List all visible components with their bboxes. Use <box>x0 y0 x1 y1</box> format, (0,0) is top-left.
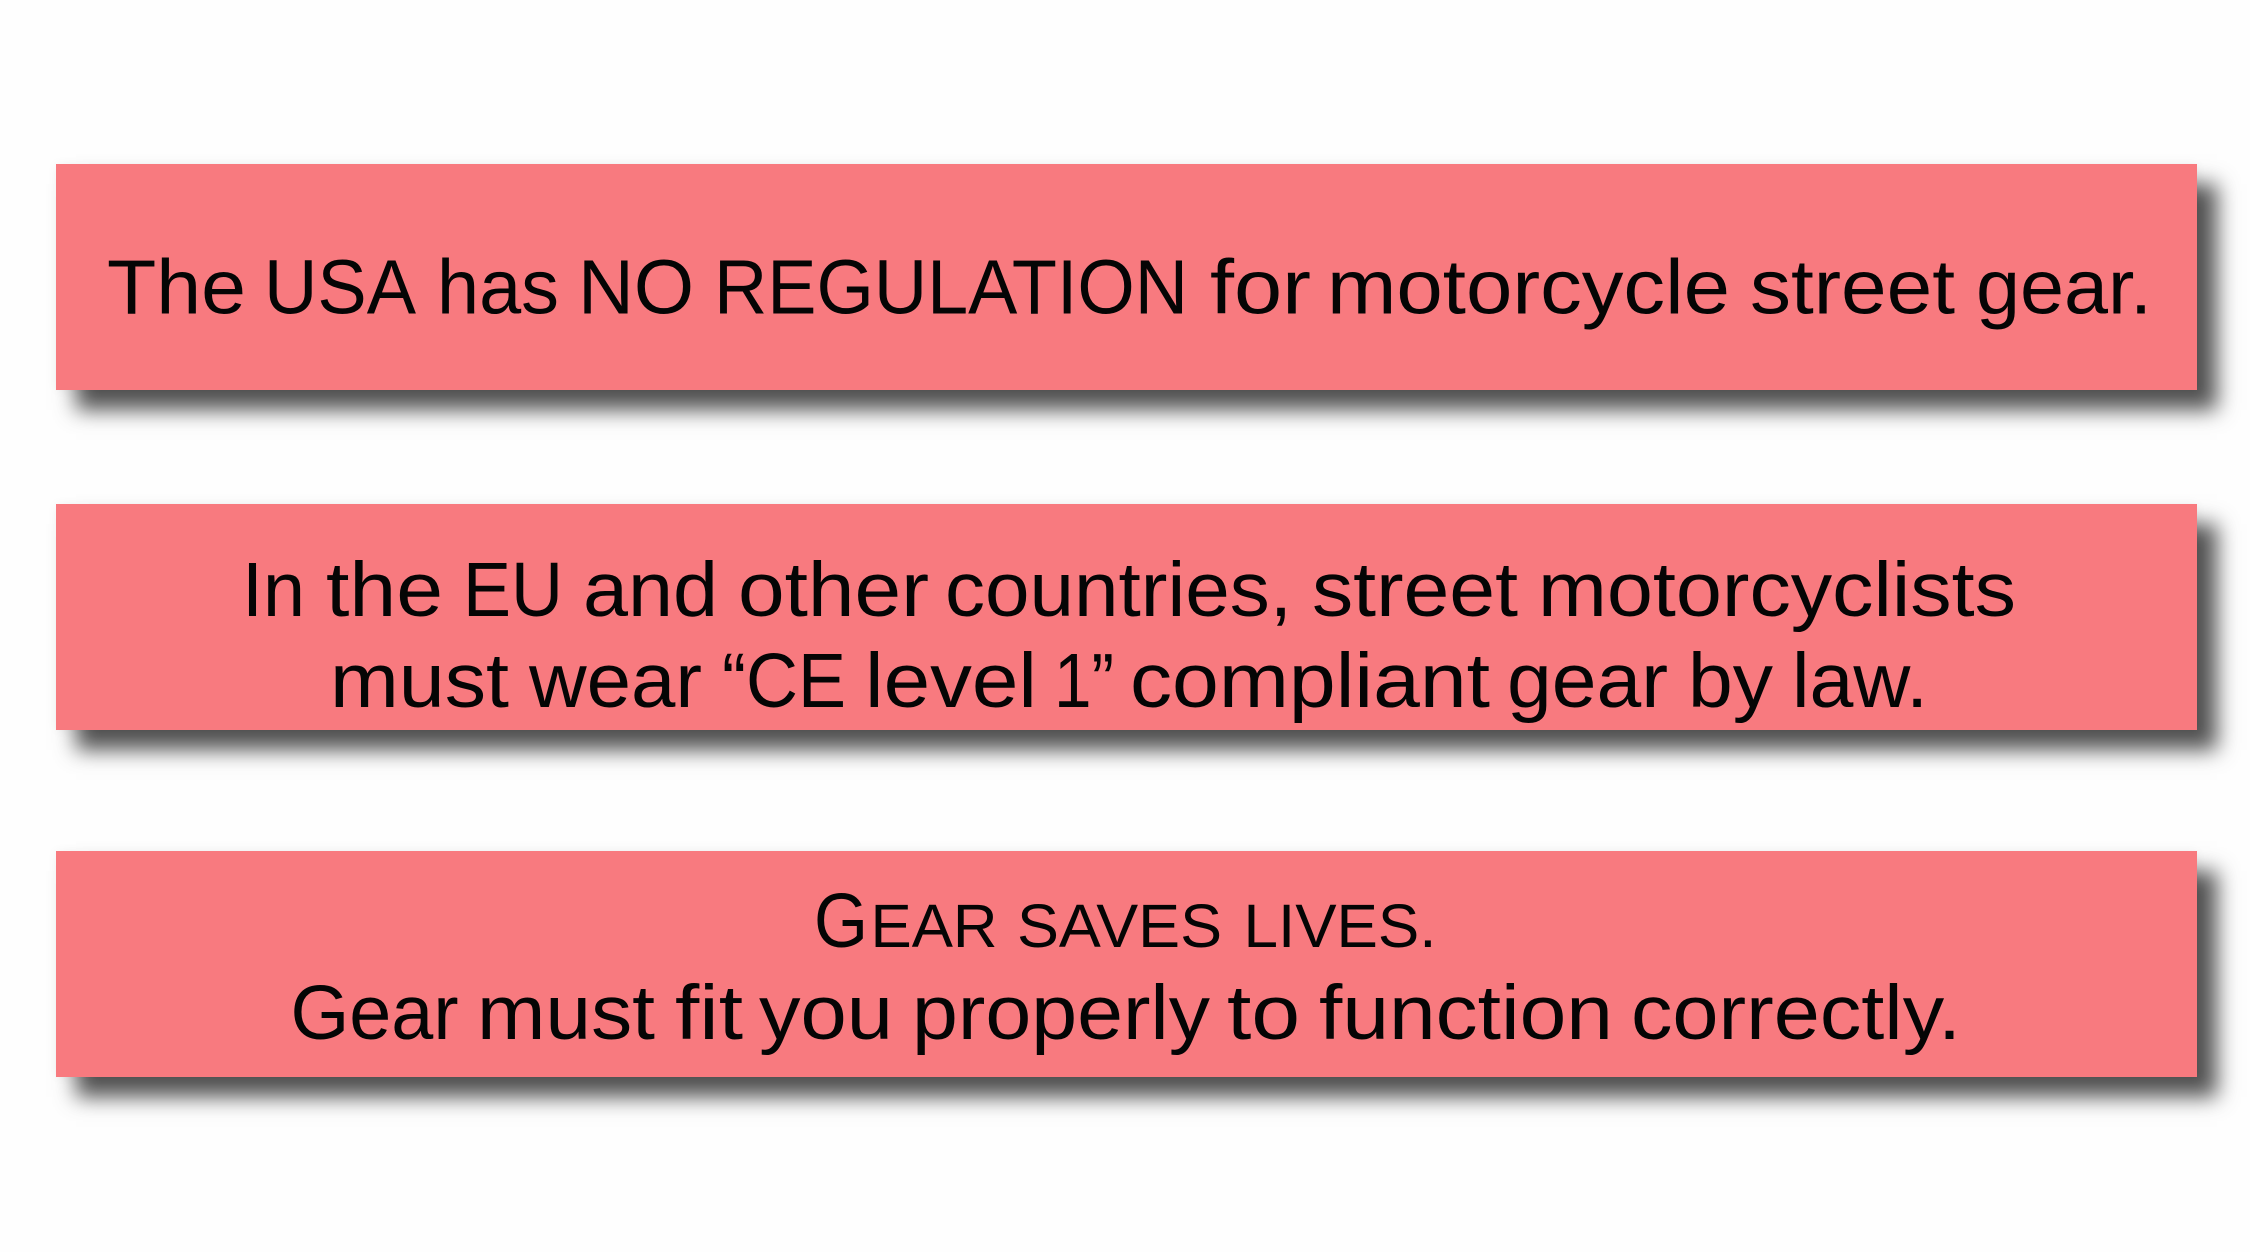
text: gear saves lives statement: SAVES <box>1017 892 1222 960</box>
text: EU and other countries statement: 1” <box>1054 638 1114 724</box>
text: gear saves lives statement: LIVES. <box>1244 892 1436 960</box>
panel: EU CE level 1 law <box>56 504 2197 730</box>
text: EU and other countries statement: EU <box>463 547 563 633</box>
text: gear saves lives statement: EAR <box>870 892 998 960</box>
text: EU and other countries statement: wear <box>528 638 702 724</box>
text: USA regulation statement: motorcycle <box>1327 244 1730 330</box>
text: gear saves lives statement: function <box>1319 970 1613 1056</box>
text: EU and other countries statement: “CE <box>722 638 846 724</box>
text: gear saves lives statement: Gear <box>290 970 458 1056</box>
text: USA regulation statement: gear. <box>1976 244 2152 330</box>
text: gear saves lives statement: G <box>814 878 868 964</box>
text: EU and other countries statement: motorcyclists <box>1538 547 2016 633</box>
text: gear saves lives statement: must <box>477 970 655 1056</box>
text: gear saves lives statement <box>290 878 1961 1056</box>
text: gear saves lives statement: you <box>759 970 893 1056</box>
text: USA regulation statement: street <box>1750 244 1955 330</box>
text: EU and other countries statement: In <box>242 547 305 633</box>
text: USA regulation statement: REGULATION <box>714 244 1188 330</box>
text: EU and other countries statement: the <box>326 547 443 633</box>
text: USA regulation statement <box>107 244 2152 330</box>
text: EU and other countries statement: by <box>1688 638 1774 724</box>
text: EU and other countries statement: gear <box>1507 638 1668 724</box>
text: EU and other countries statement: other <box>738 547 929 633</box>
text: EU and other countries statement: compliant <box>1130 638 1490 724</box>
text: USA regulation statement: The <box>107 244 246 330</box>
text: USA regulation statement: USA <box>264 244 417 330</box>
text: EU and other countries statement: countries, <box>945 547 1292 633</box>
text: USA regulation statement: NO <box>578 244 694 330</box>
text: EU and other countries statement: level <box>865 638 1037 724</box>
text: gear saves lives statement: to <box>1227 970 1300 1056</box>
text: USA regulation statement: for <box>1210 244 1311 330</box>
panel: USA no regulation <box>56 164 2197 390</box>
text: gear saves lives statement: fit <box>675 970 743 1056</box>
text: EU and other countries statement: must <box>330 638 509 724</box>
text: gear saves lives statement: properly <box>912 970 1211 1056</box>
text: EU and other countries statement <box>242 547 2016 724</box>
text: USA regulation statement: has <box>437 244 559 330</box>
text: gear saves lives statement: correctly. <box>1631 970 1961 1056</box>
panel: gear saves lives <box>56 851 2197 1077</box>
text: EU and other countries statement: street <box>1312 547 1518 633</box>
text: EU and other countries statement: and <box>583 547 718 633</box>
text: EU and other countries statement: law. <box>1792 638 1928 724</box>
